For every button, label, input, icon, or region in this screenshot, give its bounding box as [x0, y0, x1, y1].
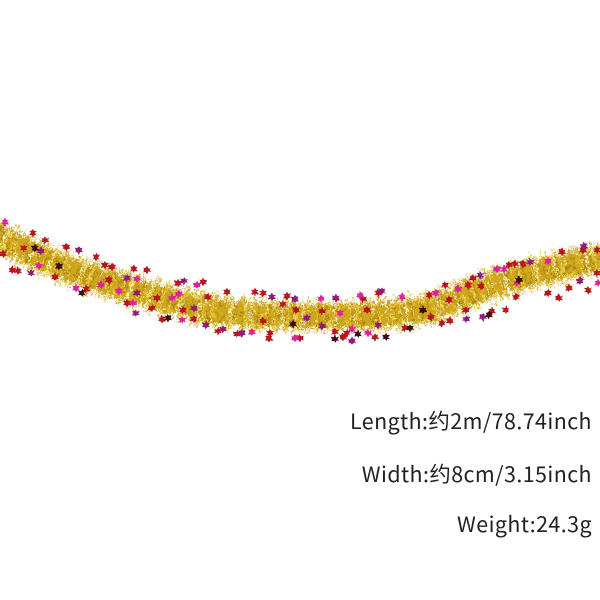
- spec: weight: Weight:24.3g: [457, 508, 592, 539]
- spec: length: Length:约2m/78.74inch: [350, 405, 592, 436]
- gold tinsel strand: [0, 232, 600, 317]
- spec: width: Width:约8cm/3.15inch: [362, 458, 592, 489]
- purple stars: [27, 242, 588, 345]
- dark stars: [31, 244, 523, 343]
- red stars: [0, 229, 600, 342]
- magenta stars: [1, 218, 600, 342]
